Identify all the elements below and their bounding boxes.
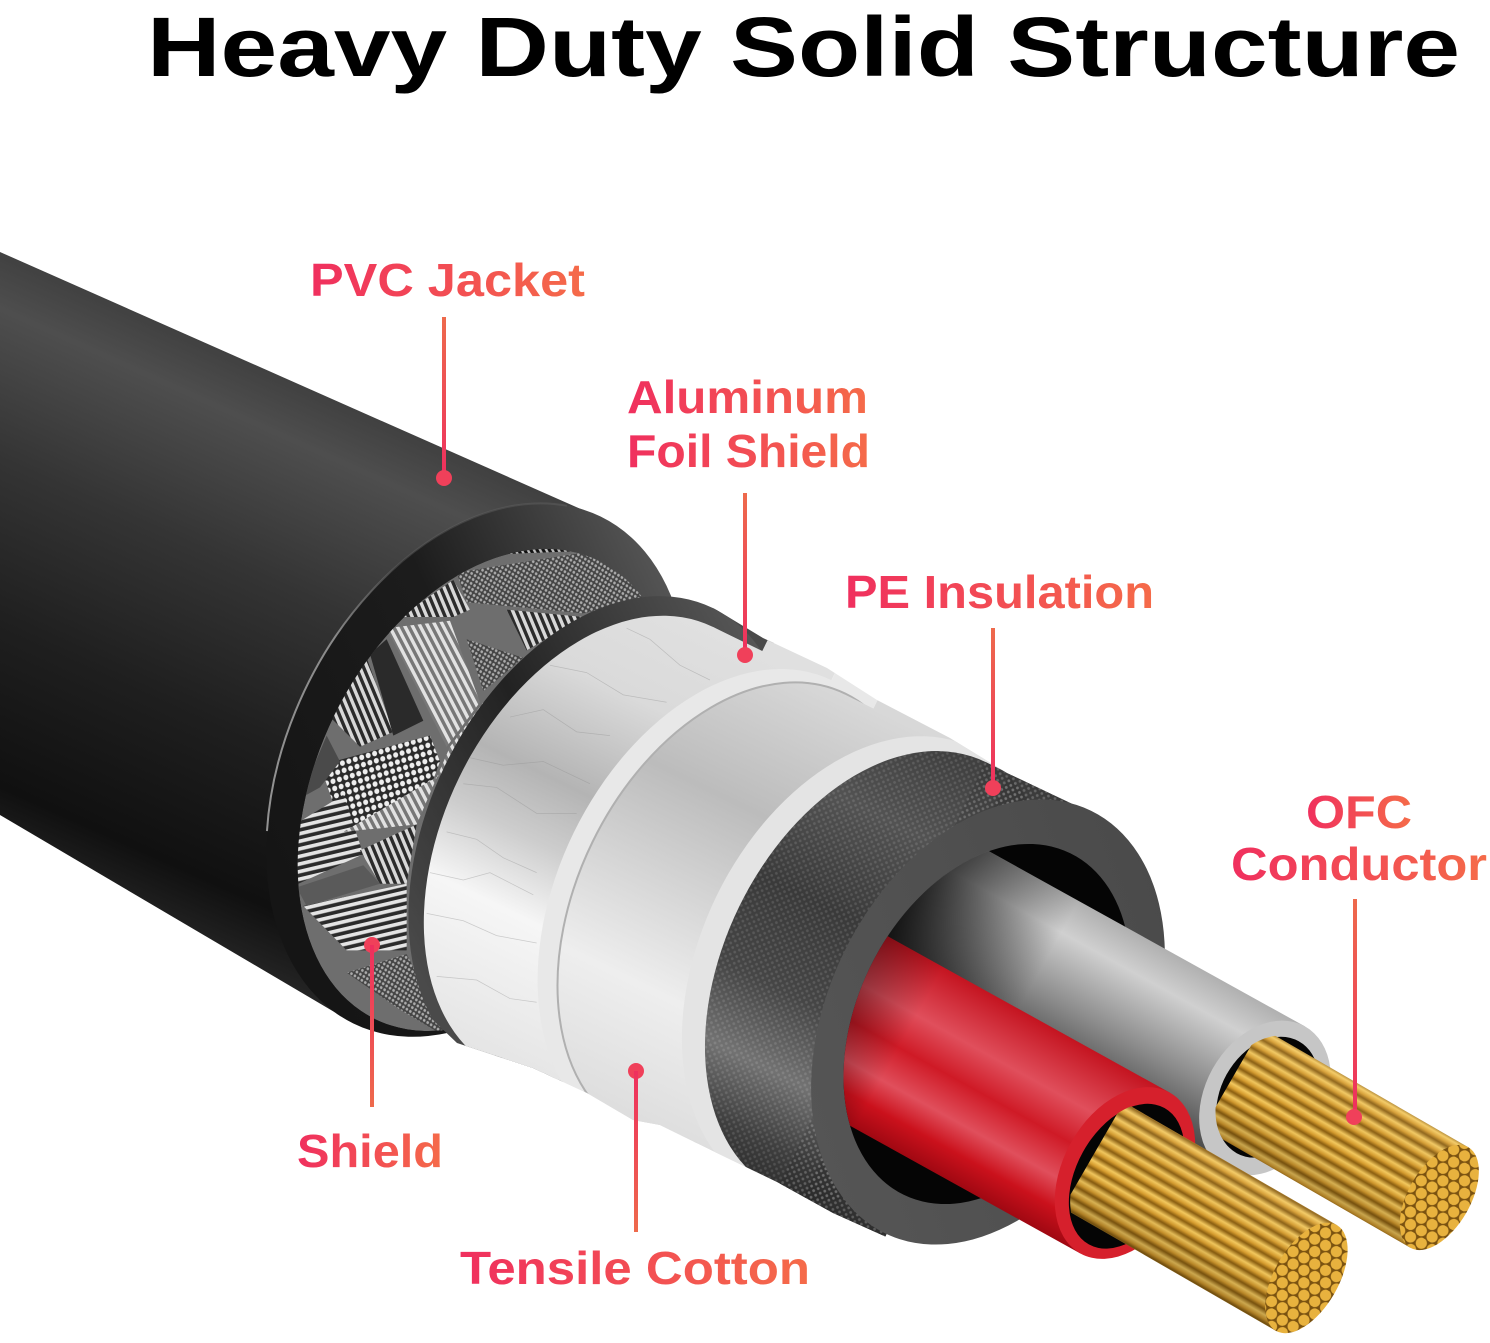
callout: Shield (297, 937, 443, 1177)
inner hole (787, 796, 1187, 1252)
gray wire (868, 851, 1330, 1176)
callout: Tensile Cotton: Tensile Cotton (460, 1242, 810, 1294)
callout: Aluminum Foil Shield: Foil Shield (627, 425, 870, 477)
PVC jacket body (0, 252, 771, 1107)
PE insulation tube (682, 736, 1072, 1236)
foil crinkles (427, 628, 710, 1002)
callout: Shield: Shield (297, 1125, 443, 1177)
callout: PE Insulation: PE Insulation (845, 566, 1154, 618)
aluminum foil shield (424, 616, 835, 1092)
braided shield (298, 549, 642, 1031)
callout: OFC Conductor: Conductor (1231, 838, 1487, 890)
gray wire copper conductor (1216, 1036, 1479, 1250)
callout: Tensile Cotton (460, 1063, 810, 1294)
callout: OFC Conductor: OFC (1306, 786, 1412, 838)
inner layers (408, 596, 1072, 1236)
callout: OFC Conductor (1231, 786, 1487, 1125)
tensile cotton (538, 669, 971, 1175)
callout: PE Insulation (845, 566, 1154, 796)
dark collar (408, 596, 774, 1082)
callout: PVC Jacket (310, 254, 585, 486)
PE end face (741, 741, 1235, 1303)
callout: PVC Jacket: PVC Jacket (310, 254, 585, 306)
title: Heavy Duty Solid Structure (147, 0, 1460, 94)
callout: Aluminum Foil Shield (627, 371, 870, 663)
red wire (844, 936, 1196, 1259)
red wire copper conductor (1070, 1106, 1348, 1334)
callout: Aluminum Foil Shield: Aluminum (627, 371, 868, 423)
